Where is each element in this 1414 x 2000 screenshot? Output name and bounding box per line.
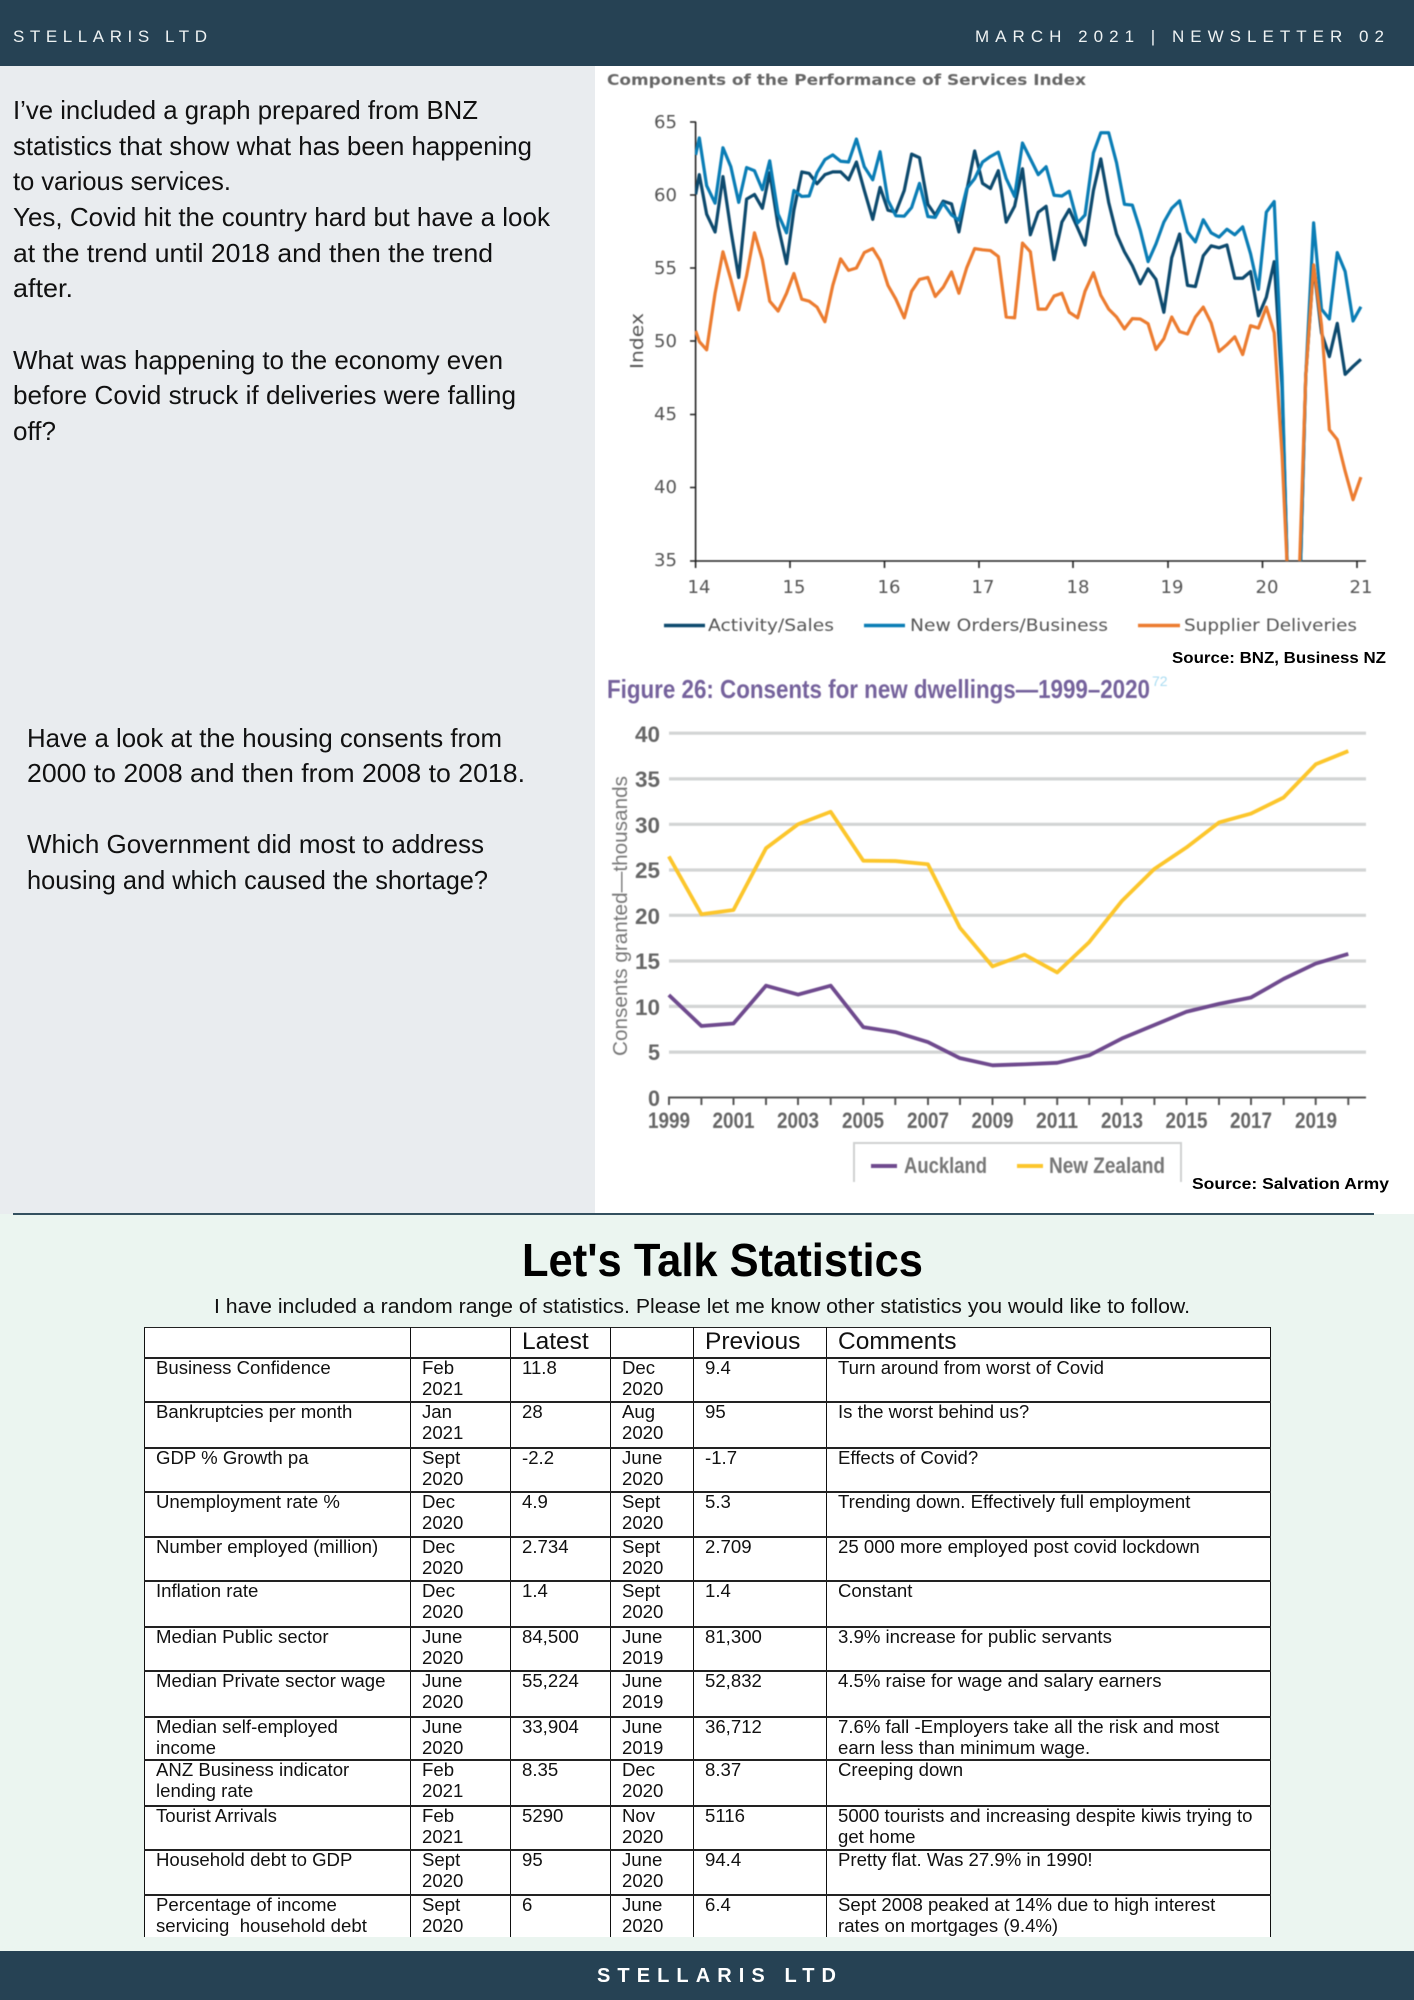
chart title: Components of the Performance of Services Index (607, 71, 1086, 89)
line: supplier deliveries (696, 233, 1361, 570)
x axis values: 21 (1350, 577, 1372, 598)
x axis values: 14 (688, 577, 710, 598)
chart legend: New Orders/Business (910, 616, 1108, 636)
y axis label: Index (627, 313, 648, 369)
row: business confidence: 2020 (622, 1378, 663, 1398)
y axis values: 35 (635, 767, 660, 792)
x axis values: 2019 (1295, 1108, 1337, 1133)
table header row: Latest (522, 1328, 589, 1355)
header bar (0, 0, 1414, 66)
text block: services commentary: What was happening to the economy even (13, 345, 503, 375)
text block: services commentary: Yes, Covid hit the country hard but have a look (13, 202, 551, 232)
row: median self-employed: income (156, 1736, 216, 1758)
y axis values: 50 (654, 331, 677, 352)
chart legend: Supplier Deliveries (1184, 616, 1357, 636)
row: income servicing household debt: 2020 (422, 1914, 463, 1936)
y axis values: 5 (648, 1040, 660, 1065)
x axis values: 16 (878, 577, 900, 598)
row: median private sector (156, 1670, 1162, 1712)
row: ANZ business indicator: 2020 (622, 1780, 663, 1800)
table header row (156, 1328, 1252, 1936)
axes (690, 122, 1366, 568)
row: inflation (156, 1580, 912, 1622)
y axis values: 65 (654, 112, 677, 133)
row: income servicing household debt: 2020 (622, 1914, 663, 1936)
text block: services commentary: after. (13, 273, 73, 303)
x axis values: 2015 (1166, 1108, 1208, 1133)
footnote number: 72 (1152, 673, 1168, 689)
y axis values: 30 (635, 813, 660, 838)
text block: housing commentary (27, 723, 525, 895)
line chart: consents for new dwellings (607, 673, 1367, 1182)
line: Auckland (669, 954, 1348, 1065)
row: median public sector: 2019 (622, 1646, 663, 1668)
row: median public sector: 2020 (422, 1646, 463, 1668)
row: business confidence: 2021 (422, 1378, 463, 1398)
text block: services commentary: statistics that show what has been happening (13, 131, 532, 161)
line chart: components of the performance of services index (607, 71, 1372, 636)
x axis values: 17 (972, 577, 994, 598)
x axis values: 2007 (907, 1108, 949, 1133)
row: household debt: 2020 (422, 1870, 463, 1890)
grid lines (669, 733, 1366, 1052)
y axis values: 0 (648, 1086, 660, 1111)
x axis values: 2013 (1101, 1108, 1143, 1133)
data lines (696, 133, 1361, 570)
chart legend: New Zealand (1049, 1153, 1165, 1178)
chart legend (664, 616, 1357, 636)
y axis values: 40 (635, 722, 660, 747)
company name: STELLARIS LTD (13, 27, 207, 46)
text block: services commentary: to various services. (13, 166, 231, 196)
row: ANZ business indicator (156, 1760, 963, 1801)
y axis title: Consents granted—thousands (610, 776, 632, 1056)
row: tourist arrivals: 2020 (622, 1826, 663, 1846)
x axis values (688, 577, 1372, 598)
x axis values: 2009 (972, 1108, 1014, 1133)
row: unemployment: 2020 (422, 1512, 463, 1532)
left grey panel (0, 66, 595, 1214)
row: business confidence (156, 1358, 1104, 1398)
row: ANZ business indicator: 2021 (422, 1780, 463, 1800)
chart legend: Auckland (904, 1153, 987, 1178)
text block: services commentary: I’ve included a graph prepared from BNZ (13, 95, 478, 125)
chart legend: Activity/Sales (708, 616, 834, 636)
row: unemployment: 2020 (622, 1512, 663, 1532)
text block: housing commentary: Have a look at the housing consents from (27, 723, 502, 753)
x axis values: 15 (783, 577, 805, 598)
x axis values: 2017 (1230, 1108, 1272, 1133)
table header row: Comments (838, 1328, 956, 1355)
text block: services commentary: off? (13, 416, 56, 446)
x axis values: 20 (1256, 577, 1278, 598)
y axis values (654, 112, 677, 571)
y axis values: 20 (635, 904, 660, 929)
line: activity/sales (696, 151, 1361, 570)
y axis values: 35 (654, 550, 677, 571)
row: median self-employed: 2020 (422, 1736, 463, 1758)
x axis values: 19 (1161, 577, 1183, 598)
row: tourist arrivals: 2021 (422, 1826, 463, 1846)
row: median self-employed: earn less than minimum wage. (838, 1736, 1090, 1758)
y axis values: 40 (654, 477, 677, 498)
row: GDP growth: 2020 (422, 1468, 463, 1488)
row: household debt: 2020 (622, 1870, 663, 1890)
x axis values: 2005 (842, 1108, 884, 1133)
row: number employed: 2020 (422, 1556, 463, 1578)
y axis values (635, 722, 660, 1111)
text block: services commentary: at the trend until 2018 and then the trend (13, 238, 493, 268)
row: income servicing household debt: servicing household debt (156, 1914, 367, 1936)
chart title: Figure 26: Consents for new dwellings—1999–2020 (607, 674, 1150, 704)
y axis values: 10 (635, 995, 660, 1020)
row: median self-employed (156, 1716, 1220, 1758)
x axis values (648, 1108, 1337, 1133)
row: inflation: 2020 (422, 1600, 463, 1622)
row: inflation: 2020 (622, 1600, 663, 1622)
x axis with year ticks (668, 1097, 1366, 1105)
y axis values: 15 (635, 949, 660, 974)
text block: housing commentary: 2000 to 2008 and then from 2008 to 2018. (27, 758, 525, 788)
row: GDP growth: 2020 (622, 1468, 663, 1488)
intro sentence: I have included a random range of statistics. Please let me know other statistics you would like to follow. (214, 1295, 1190, 1318)
row: bankruptcies: 2020 (622, 1422, 663, 1442)
row: median private sector: 2020 (422, 1690, 463, 1712)
x axis values: 2011 (1036, 1108, 1078, 1133)
footer company name: STELLARIS LTD (597, 1965, 836, 1987)
row: unemployment (156, 1492, 1190, 1532)
y axis values: 45 (654, 404, 677, 425)
x axis values: 18 (1067, 577, 1089, 598)
row: household debt (156, 1850, 1093, 1890)
line: new orders/business (696, 133, 1361, 570)
text block: services commentary (13, 95, 551, 446)
x axis values: 1999 (648, 1108, 690, 1133)
chart legend (854, 1143, 1181, 1182)
row: GDP growth (156, 1448, 978, 1488)
y axis values: 25 (635, 858, 660, 883)
row: income servicing household debt (156, 1894, 1216, 1936)
row: median self-employed: 2019 (622, 1736, 663, 1758)
lower statistics section background (0, 1214, 1414, 1951)
row: tourist arrivals: get home (838, 1826, 916, 1846)
text block: services commentary: before Covid struck if deliveries were falling (13, 380, 516, 410)
row: bankruptcies (156, 1402, 1029, 1442)
heading: Let's Talk Statistics: Let's Talk Statistics (522, 1234, 923, 1286)
row: median public sector (156, 1626, 1112, 1668)
statistics table (144, 1327, 1271, 1937)
x axis values: 2001 (712, 1108, 754, 1133)
text block: housing commentary: housing and which caused the shortage? (27, 865, 488, 895)
source note: BNZ, Business NZ: Source: BNZ, Business NZ (1172, 650, 1386, 667)
row: ANZ business indicator: lending rate (156, 1780, 253, 1800)
row: tourist arrivals (156, 1806, 1252, 1847)
row: median private sector: 2019 (622, 1690, 663, 1712)
source note: Salvation Army: Source: Salvation Army (1192, 1176, 1389, 1193)
row: income servicing household debt: rates on mortgages (9.4%) (838, 1914, 1058, 1936)
x axis values: 2003 (777, 1108, 819, 1133)
issue date: MARCH 2021 | NEWSLETTER 02 (975, 27, 1384, 46)
row: bankruptcies: 2021 (422, 1422, 463, 1442)
row: number employed: 2020 (622, 1556, 663, 1578)
y axis values: 60 (654, 185, 677, 206)
table header row: Previous (705, 1328, 800, 1355)
footer bar (0, 1951, 1414, 2000)
line: New Zealand (669, 751, 1348, 972)
y axis values: 55 (654, 258, 677, 279)
text block: housing commentary: Which Government did most to address (27, 829, 484, 859)
row: number employed (156, 1536, 1200, 1578)
